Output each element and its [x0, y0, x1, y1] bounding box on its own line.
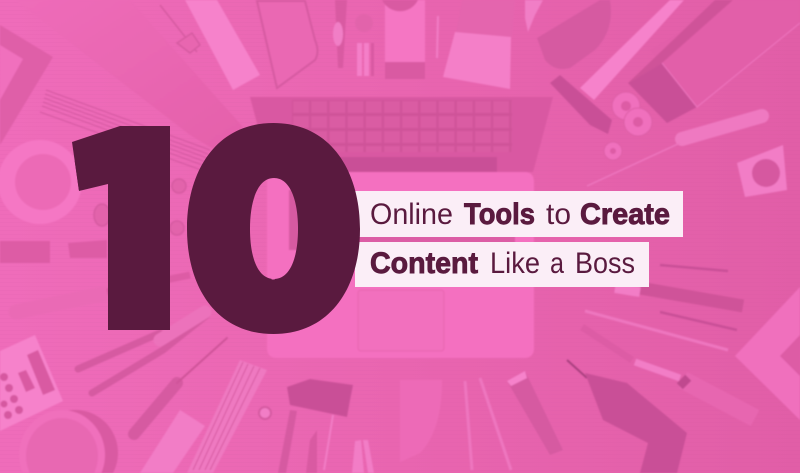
banner line one: Create	[580, 198, 670, 231]
pointed tool	[525, 0, 543, 32]
right side screws and pencil	[585, 265, 743, 350]
small ruler	[140, 410, 205, 473]
washer holes	[610, 101, 643, 154]
banner line two	[355, 242, 649, 287]
paint brush	[443, 0, 515, 89]
title banner	[355, 191, 683, 287]
banner line one: Tools	[464, 198, 535, 231]
marking tool	[160, 5, 200, 53]
drill	[567, 360, 687, 473]
roll of tape	[0, 140, 82, 224]
nail	[437, 16, 438, 58]
dark tape roll	[537, 0, 611, 69]
banner line two: Content	[370, 247, 478, 280]
calculator	[0, 335, 63, 431]
clamp	[278, 379, 374, 473]
chisel right	[587, 116, 762, 186]
hacksaw	[257, 1, 318, 88]
wood plank	[628, 0, 800, 123]
hex nut	[259, 407, 271, 419]
chisel lower right	[582, 327, 755, 418]
pliers	[78, 312, 207, 393]
screwdriver	[134, 338, 227, 434]
washers	[604, 92, 652, 160]
digit 0: 0	[193, 68, 354, 392]
top ruler	[185, 0, 260, 90]
hammer	[550, 0, 684, 134]
screwdrivers bottom	[465, 378, 511, 470]
laptop keyboard deck	[250, 97, 553, 181]
paint tin	[19, 410, 118, 473]
handle of tool left	[0, 240, 107, 263]
mallet	[400, 380, 442, 462]
laptop lower body	[267, 172, 534, 358]
banner line two: a	[550, 247, 564, 280]
wire bundle	[40, 90, 210, 171]
banner line one: Online	[370, 198, 453, 231]
bottom chisel	[507, 371, 563, 455]
tape measure	[737, 145, 787, 197]
picture frame corner	[0, 25, 53, 145]
digit 1: 1	[52, 68, 213, 392]
chisel left	[16, 275, 190, 312]
set square	[735, 287, 800, 420]
folding rule	[187, 360, 267, 473]
banner line two: Like	[490, 247, 540, 280]
banner line one	[355, 191, 683, 237]
banner line two: Boss	[575, 247, 635, 280]
scissors and pins	[333, 0, 374, 76]
banner line one: to	[546, 198, 571, 231]
hand saw	[15, 0, 243, 150]
tape box	[382, 0, 425, 79]
big number 10	[72, 123, 360, 334]
small nuts and rings	[94, 179, 186, 235]
